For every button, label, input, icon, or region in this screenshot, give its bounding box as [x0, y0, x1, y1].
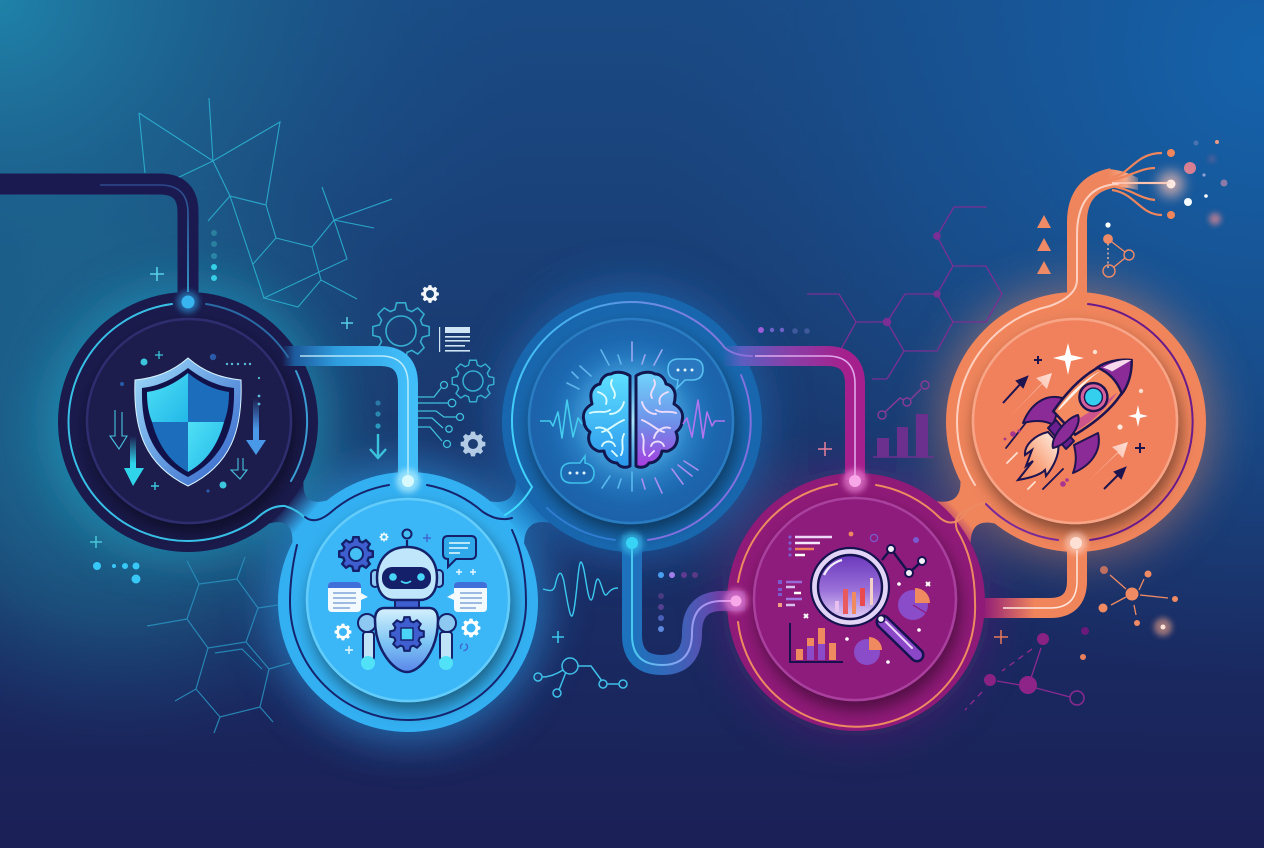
decor: dots column under pipe — [211, 230, 217, 281]
ambient glows behind circles — [50, 284, 1214, 740]
rocket: dark arrows — [1003, 377, 1125, 489]
panel: shield outer disc — [58, 292, 318, 552]
decor: teal dots and plus bottom left — [90, 536, 140, 584]
ring lines: brain circle — [505, 302, 752, 540]
analytics: text line stubs — [786, 537, 832, 605]
node: top of analytics circle — [843, 469, 867, 493]
decor: hexagon grid upper right — [807, 207, 1002, 379]
icon: shield with arrows — [110, 351, 266, 493]
decor: scattered light particles top right — [1184, 140, 1228, 225]
pipe: orange lower highlight — [1003, 550, 1077, 608]
robot: neck — [395, 598, 419, 610]
robot: antenna — [402, 530, 412, 549]
icon: brain with signals — [540, 337, 725, 505]
icon: magnifier and analytics — [778, 532, 930, 665]
pipe: dark entry line to shield circle — [0, 184, 188, 300]
rocket: flame — [1018, 432, 1058, 480]
panel: robot outer disc — [278, 472, 538, 732]
node: top of robot circle — [396, 469, 420, 493]
panel: brain inner disc — [529, 319, 733, 523]
rocket: crosses and stars — [1034, 343, 1148, 453]
node: fibre endpoints top right — [1112, 149, 1184, 219]
ring lines: analytics circle — [738, 484, 990, 727]
node: bottom of brain circle — [621, 532, 643, 554]
pipe: orange up to fibres — [1077, 153, 1170, 300]
brain: left hemisphere — [583, 372, 630, 467]
rocket: exhaust streaks — [1006, 420, 1063, 489]
robot: arms — [358, 614, 456, 660]
ring lines: robot circle — [290, 485, 526, 720]
rocket: centre fin — [1048, 415, 1079, 449]
analytics: pie charts — [854, 588, 930, 665]
decor: downward arrow above robot — [370, 400, 386, 458]
decor: dots right of U pipe — [658, 572, 698, 632]
analytics: trend nodes — [882, 545, 926, 577]
analytics: handle — [883, 622, 917, 655]
panel: analytics outer disc — [727, 473, 985, 731]
decor: polygon network top left — [139, 98, 392, 307]
robot: head — [377, 547, 437, 600]
brain: speech bubbles — [561, 359, 703, 483]
robot: hand glows — [361, 656, 453, 670]
decor: hexagon network bottom left — [147, 557, 290, 733]
robot: left window — [328, 582, 368, 612]
analytics: lens — [811, 548, 889, 626]
analytics: sparkle dots — [804, 582, 930, 664]
panel: robot inner disc — [307, 499, 509, 701]
panel: analytics inner disc — [754, 498, 956, 700]
arrows: salmon triangles — [1037, 215, 1051, 274]
panel: brain outer disc — [502, 292, 762, 552]
pipe: magenta to orange, lower right — [975, 540, 1077, 608]
decor: plus top left — [150, 267, 164, 281]
panel: rocket outer disc — [946, 292, 1206, 552]
ring lines: rocket circle — [957, 184, 1193, 540]
pipe: blue from shield to robot — [282, 356, 408, 480]
node: top of shield circle — [177, 291, 199, 313]
brain: right hemisphere — [636, 372, 683, 467]
decor: pulse wave under centre — [543, 562, 618, 616]
decor: node network under centre — [534, 658, 627, 697]
robot: ears — [371, 570, 443, 587]
robot: body with chip gear — [375, 608, 438, 672]
junction bridges between circles — [269, 481, 995, 543]
panel: shield inner disc — [87, 319, 291, 523]
decor: plus near magenta circle — [818, 442, 832, 456]
decor: plus under centre — [552, 631, 564, 643]
icon: rocket with arrows and stars — [1000, 343, 1148, 492]
decor: salmon network lower right — [1098, 566, 1178, 636]
rocket: pale arrows — [1000, 373, 1128, 492]
node: bottom of rocket circle — [1065, 532, 1087, 554]
analytics: bar chart — [790, 623, 843, 662]
panel: rocket inner disc — [973, 319, 1177, 523]
decor: gears and circuit cluster — [341, 285, 494, 456]
ring lines: shield circle — [69, 304, 307, 541]
robot: right window — [447, 582, 487, 612]
pipe: U-shaped from brain to analytics — [632, 535, 745, 665]
node: left of analytics circle — [724, 589, 748, 613]
rocket: body — [1050, 345, 1145, 438]
rocket: fins — [1023, 397, 1099, 473]
rocket: confetti — [1004, 429, 1069, 487]
brain: pulse lines — [540, 400, 725, 438]
robot: speech bubble — [443, 536, 476, 567]
pipe: purple from brain to analytics — [722, 356, 855, 480]
brain: radiating ticks — [567, 342, 698, 493]
icon: robot — [328, 530, 487, 672]
decor: dots row above pipe — [758, 327, 810, 334]
decor: mini bar chart with trend — [873, 381, 934, 457]
decor: plum network lower right — [965, 627, 1089, 710]
decor: mini triangle network — [1103, 222, 1134, 277]
